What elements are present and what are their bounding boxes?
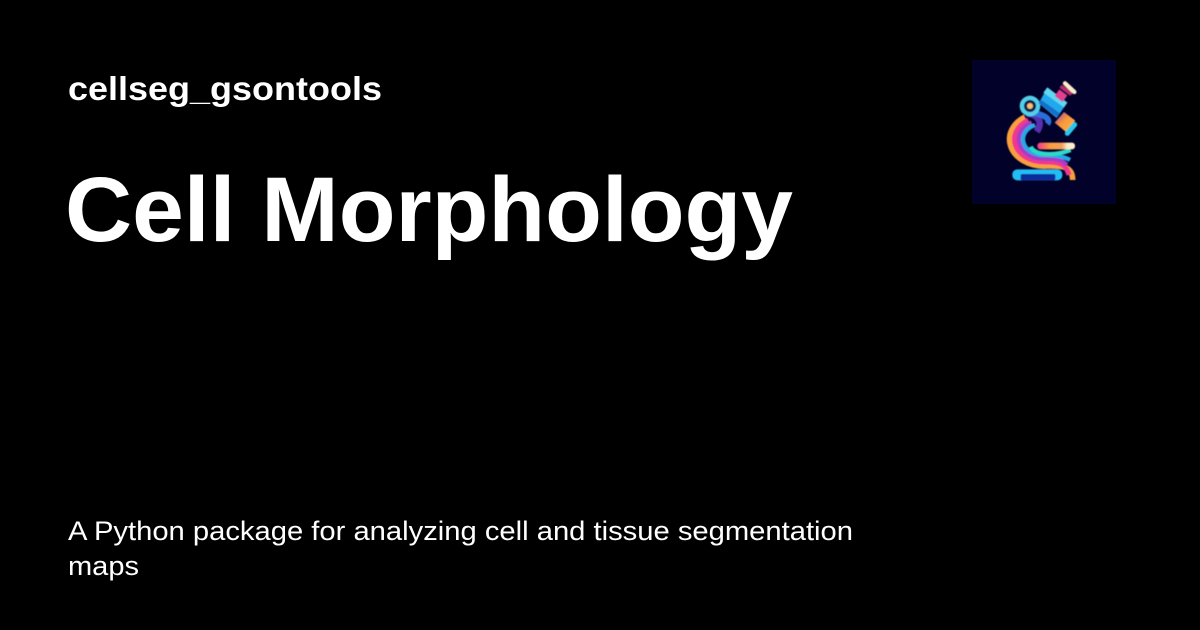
icon: microscope logo: [972, 60, 1116, 204]
description: A Python package for analyzing cell and tissue segmentation: [68, 516, 853, 546]
description: maps: [68, 551, 139, 581]
title: Cell Morphology: [65, 159, 793, 261]
top eyepiece: [1055, 83, 1074, 102]
eyepiece wheel: [1020, 96, 1040, 116]
project name: cellseg_gsontools: [68, 70, 382, 107]
stage: [1037, 143, 1075, 149]
objective lens: [1055, 112, 1075, 133]
base: [1012, 169, 1062, 180]
tube: [1039, 87, 1067, 118]
arm: curved layered bands: [1010, 113, 1073, 180]
description: [68, 516, 853, 581]
